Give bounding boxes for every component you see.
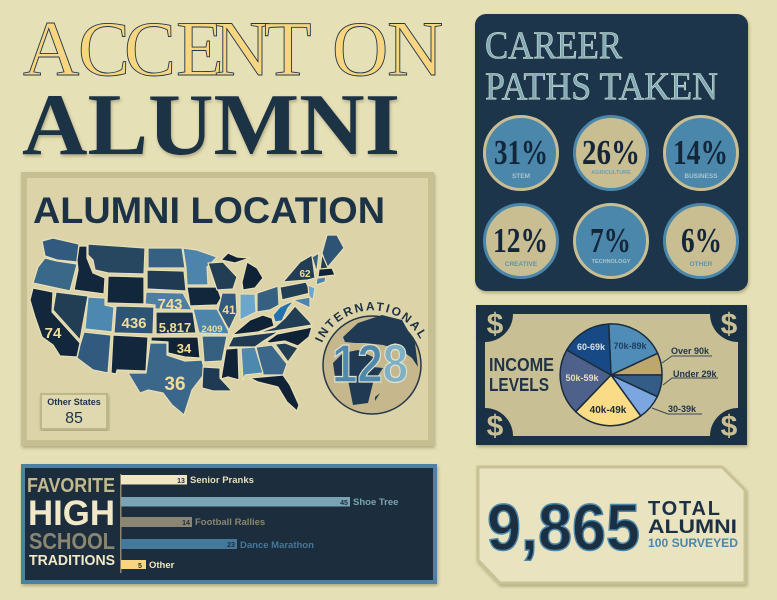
- heading: income levels: [489, 355, 554, 395]
- stat: business: 14%: [673, 133, 728, 172]
- bar: shoe tree: [121, 497, 398, 508]
- panel: alumni location: [20, 172, 436, 450]
- stat: other: [664, 204, 738, 278]
- bar: shoe tree: 45: [340, 500, 348, 507]
- total label: TOTAL: [648, 498, 720, 520]
- stat: creative: 12%: [493, 221, 548, 260]
- total label: 100 SURVEYED: [648, 538, 738, 550]
- globe number: 128: [332, 334, 408, 394]
- dollar signs: $: [487, 308, 504, 341]
- corner badges: [485, 314, 738, 436]
- bar: dance marathon: [121, 539, 314, 551]
- bar: other: Other: [149, 560, 175, 571]
- bar: football rallies: 14: [182, 520, 190, 527]
- panel: favorite high school traditions: [23, 466, 435, 582]
- dollar signs: $: [487, 410, 504, 443]
- pie slice labels: 70k-89k: [613, 341, 648, 351]
- pie slice labels: 60-69k: [577, 342, 606, 352]
- stat: other: 6%: [681, 221, 722, 260]
- heading: career paths taken: PATHS TAKEN: [485, 65, 718, 108]
- heading: traditions: SCHOOL: [29, 528, 115, 554]
- stat: agriculture: [574, 116, 648, 190]
- title line: alumni: ALUMNI: [22, 77, 400, 174]
- heading: traditions: TRADITIONS: [29, 552, 115, 569]
- total number: 9,865: [487, 490, 640, 564]
- stat: technology: 7%: [590, 221, 631, 260]
- pie slice labels: [565, 341, 648, 416]
- panel: income levels: [476, 305, 750, 448]
- map value labels: [45, 269, 311, 395]
- pie callouts: Over 90k: [671, 346, 710, 356]
- heading: traditions: HIGH: [28, 494, 115, 533]
- panel: total alumni: [478, 467, 745, 583]
- pie slice labels: 50k-59k: [565, 373, 600, 383]
- map value labels: 34: [177, 341, 192, 356]
- stat: technology: [574, 204, 648, 278]
- dollar signs: [487, 308, 738, 443]
- total label: ALUMNI: [648, 517, 737, 538]
- bar chart: [120, 474, 398, 573]
- pie slice labels: 40k-49k: [590, 405, 627, 416]
- bar: football rallies: [121, 517, 265, 528]
- bar: shoe tree: Shoe Tree: [353, 497, 398, 508]
- map value labels: 436: [121, 315, 147, 332]
- stat: other: OTHER: [690, 261, 713, 268]
- stat: agriculture: AGRICULTURE: [591, 170, 631, 176]
- map value labels: 62: [299, 269, 311, 280]
- panel: career paths: [475, 14, 748, 291]
- bar: dance marathon: Dance Marathon: [240, 540, 314, 551]
- map value labels: 5,817: [159, 320, 191, 335]
- title line: accent on: ACCENTON: [23, 5, 443, 92]
- stat: business: BUSINESS: [684, 173, 718, 180]
- stat: agriculture: 26%: [582, 133, 640, 172]
- bar: senior pranks: [121, 475, 254, 486]
- pie callouts: Under 29k: [673, 369, 718, 379]
- bar: other: [121, 560, 175, 571]
- map value labels: 41: [222, 303, 236, 317]
- bar: senior pranks: 13: [177, 478, 185, 485]
- callout: other states: [41, 394, 107, 429]
- international globe: [314, 302, 425, 415]
- dollar signs: $: [721, 308, 738, 341]
- globe land: [333, 315, 418, 405]
- pie callouts: [652, 346, 718, 414]
- stat: business: [664, 116, 738, 190]
- pie chart: [560, 324, 662, 426]
- callout: other states: 85: [65, 410, 83, 427]
- stat: STEM: 31%: [494, 133, 548, 172]
- callout: other states: Other States: [47, 397, 101, 407]
- title: [22, 5, 443, 174]
- heading: career paths taken: [485, 24, 718, 108]
- map value labels: 36: [164, 374, 186, 395]
- heading: traditions: FAVORITE: [27, 475, 115, 497]
- dollar signs: $: [721, 410, 738, 443]
- map value labels: 2409: [201, 324, 223, 335]
- heading: income levels: INCOME: [489, 355, 554, 375]
- total label: [648, 498, 738, 550]
- bar: football rallies: Football Rallies: [195, 517, 265, 528]
- stat: creative: [484, 204, 558, 278]
- heading: income levels: LEVELS: [489, 375, 549, 395]
- heading: alumni location: ALUMNI LOCATION: [33, 190, 385, 231]
- map value labels: 74: [45, 325, 62, 342]
- bar: other: 5: [138, 563, 142, 570]
- stat: STEM: [484, 116, 558, 190]
- globe arc label: INTERNATIONAL: [314, 302, 425, 342]
- heading: traditions: [27, 475, 115, 569]
- pie callouts: 30-39k: [668, 404, 697, 414]
- stat: STEM: STEM: [512, 173, 530, 180]
- heading: career paths taken: CAREER: [485, 24, 622, 67]
- map value labels: 743: [157, 296, 183, 313]
- map of US states: [30, 235, 344, 415]
- stat: creative: CREATIVE: [505, 261, 538, 268]
- bar: dance marathon: 23: [227, 542, 235, 549]
- stat: technology: TECHNOLOGY: [592, 259, 631, 265]
- bar: senior pranks: Senior Pranks: [190, 475, 254, 486]
